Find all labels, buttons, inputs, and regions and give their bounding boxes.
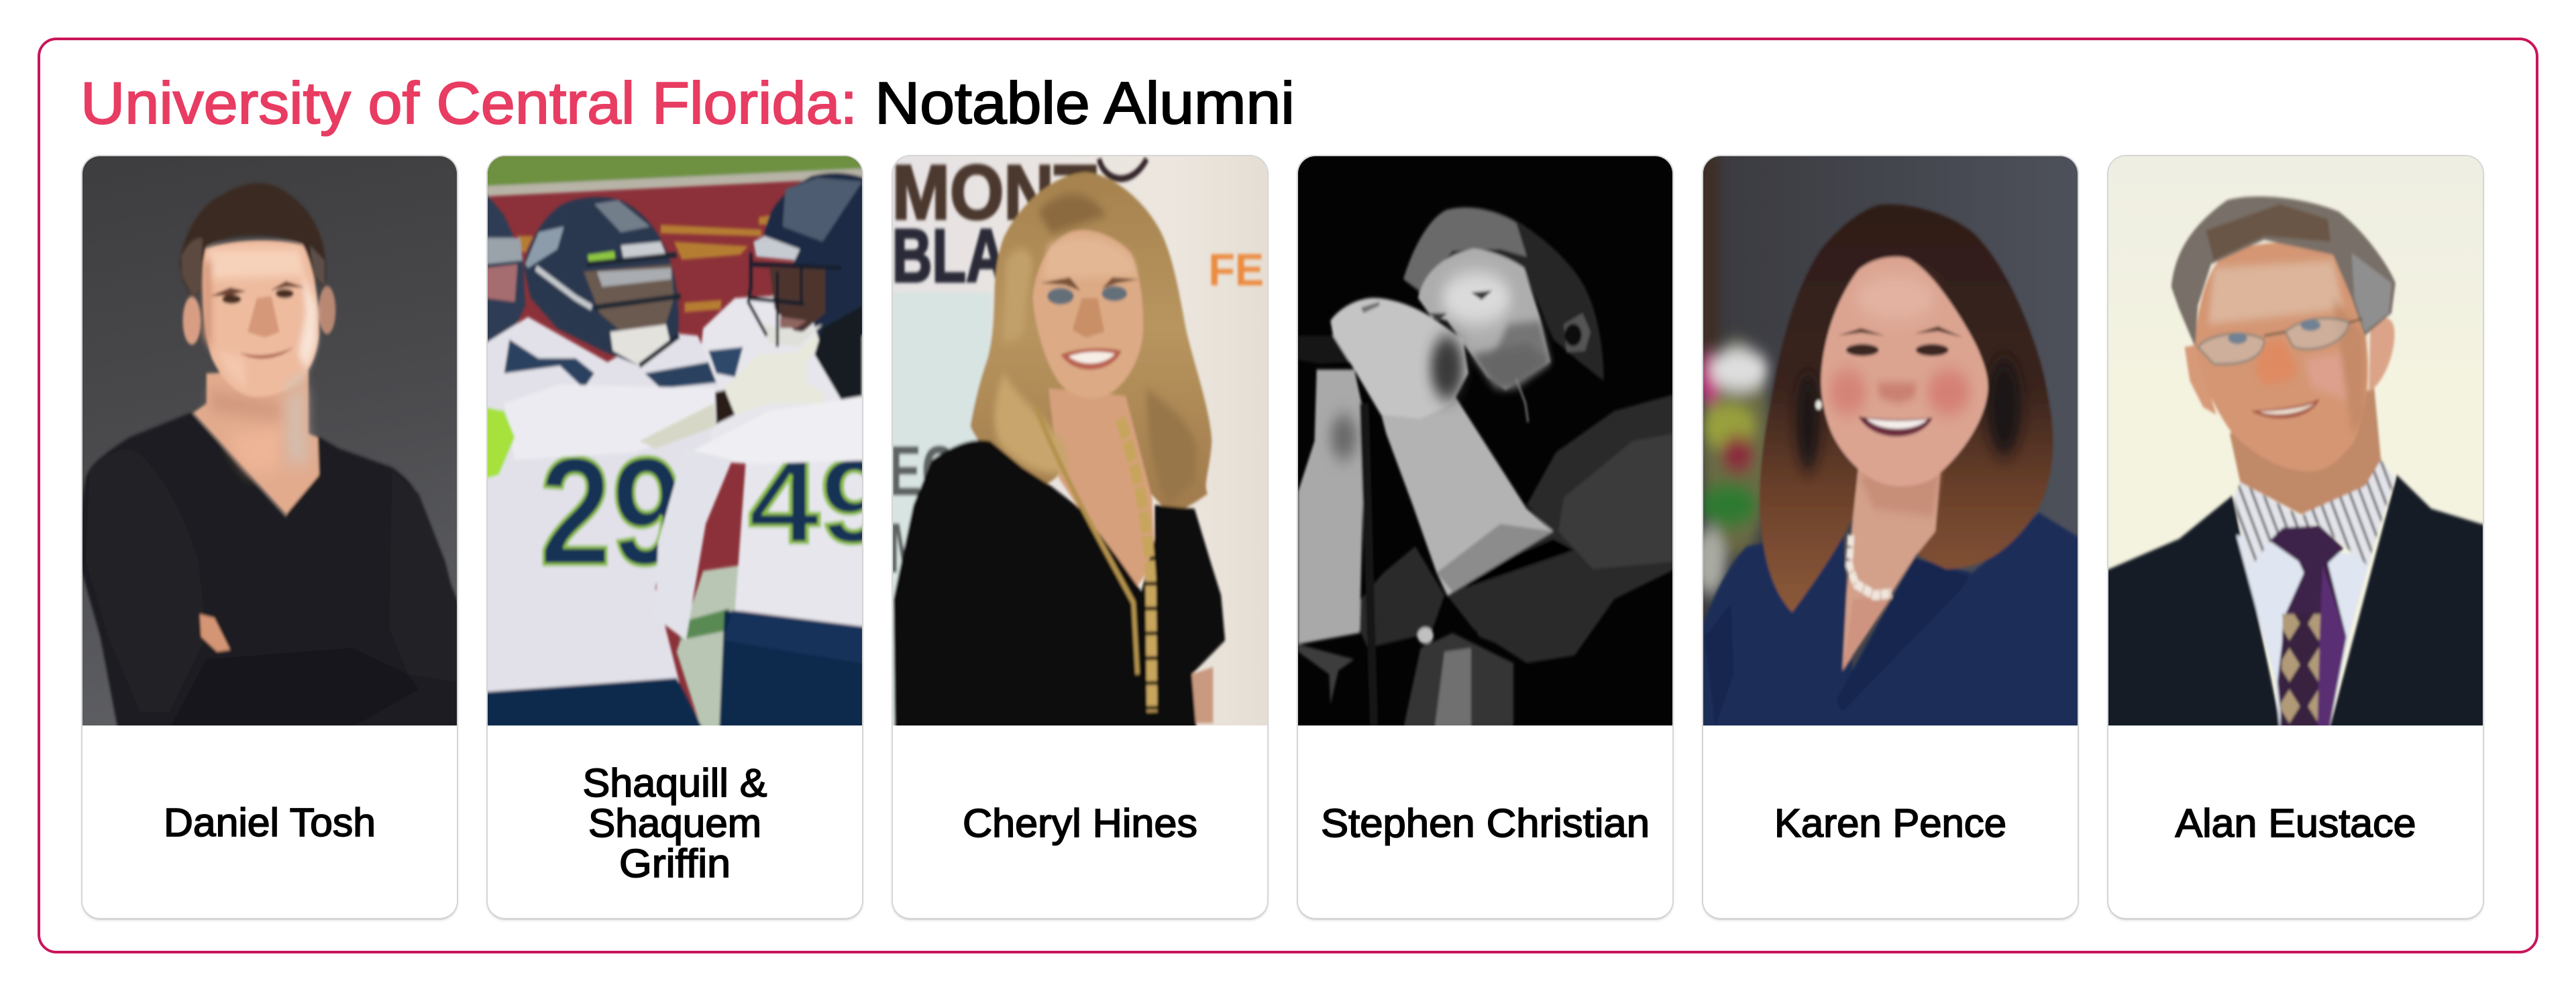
shirt [2237,535,2375,734]
arms [1298,369,1365,644]
photo: Daniel Tosh [83,156,457,725]
center visor and face [584,264,674,336]
ears [182,296,201,345]
glove [724,328,825,415]
jacket [1702,512,2082,734]
hair highlights over chest [995,194,1197,505]
hand [1330,298,1468,418]
name: Stephen Christian: Stephen Christian [1321,801,1650,846]
left helmet [486,192,525,358]
hair [1403,207,1604,381]
card: Stephen Christian [1297,155,1674,920]
face [1032,230,1143,398]
hair [1760,205,2053,612]
end-zone lettering [517,215,769,312]
arms [504,385,724,460]
ear [1564,313,1591,353]
jersey numbers: 29 [539,426,684,598]
torso [79,413,461,734]
name: Shaquill & Shaquem Griffin: Griffin [619,841,731,886]
brows and eyes [1837,327,1964,337]
smile [2251,399,2320,418]
card: Cheryl Hines [892,155,1269,920]
smile [1858,416,1933,436]
title: University of Central Florida: [80,70,857,136]
face [1418,248,1550,390]
left green glove [486,407,515,479]
photo: Karen Pence [1703,156,2078,725]
right face [769,268,825,336]
name: Cheryl Hines: Cheryl Hines [963,801,1197,846]
card: Daniel Tosh [81,155,458,920]
blurred flowers [1694,339,1771,595]
center player jersey [486,317,719,693]
ears [2184,345,2216,415]
name: Daniel Tosh: Daniel Tosh [164,801,376,845]
center helmet [524,197,679,366]
name: Karen Pence: Karen Pence [1774,801,2006,846]
mic stand [1360,404,1378,734]
name: Shaquill & Shaquem Griffin [582,761,767,886]
beard [1471,343,1550,388]
neck and chest [1843,467,1941,671]
neck and chest [193,369,319,514]
backdrop panel [890,292,990,744]
glasses [2198,318,2349,364]
face [1821,257,1988,486]
name: Shaquill & Shaquem Griffin: Shaquill & [582,761,767,805]
title [80,70,1295,137]
photo: Alan Eustace [2108,156,2483,725]
microphone [1298,336,1353,364]
lower pants [470,678,706,734]
hair [970,172,1212,513]
face [2195,243,2368,471]
necklace [1035,407,1138,675]
card: Karen Pence [1702,155,2079,920]
card: Alan Eustace [2107,155,2484,920]
hand [200,614,230,652]
photo: Cheryl Hines: BLA [893,213,1006,298]
card: Shaquill & Shaquem Griffin [486,155,863,920]
neck and chest [1049,388,1155,591]
lower grass [677,565,740,734]
brows, eyes, nose, mouth [211,288,246,296]
photo: Griffin brothers [488,156,862,725]
dress [894,440,1225,734]
jacket [2105,475,2487,734]
right player jersey [690,290,883,629]
pearl necklace [1849,535,1892,595]
face [203,240,319,397]
neck [2230,388,2381,514]
jacket [1447,394,1675,663]
title: Notable Alumni [875,70,1295,136]
name: Shaquill & Shaquem Griffin: Shaquem [588,801,761,846]
tie [2269,526,2347,734]
right helmet [764,173,883,351]
photo: Cheryl Hines: FE [1208,245,1264,295]
collar [2234,460,2395,569]
photo: Griffin brothers: 49 [748,433,862,568]
hair [2171,196,2396,347]
photo: Cheryl Hines [893,156,1267,725]
field: grass and stripe [470,148,885,189]
name: Alan Eustace: Alan Eustace [2175,801,2416,846]
hair [180,183,326,298]
photo: Stephen Christian [1298,156,1672,725]
